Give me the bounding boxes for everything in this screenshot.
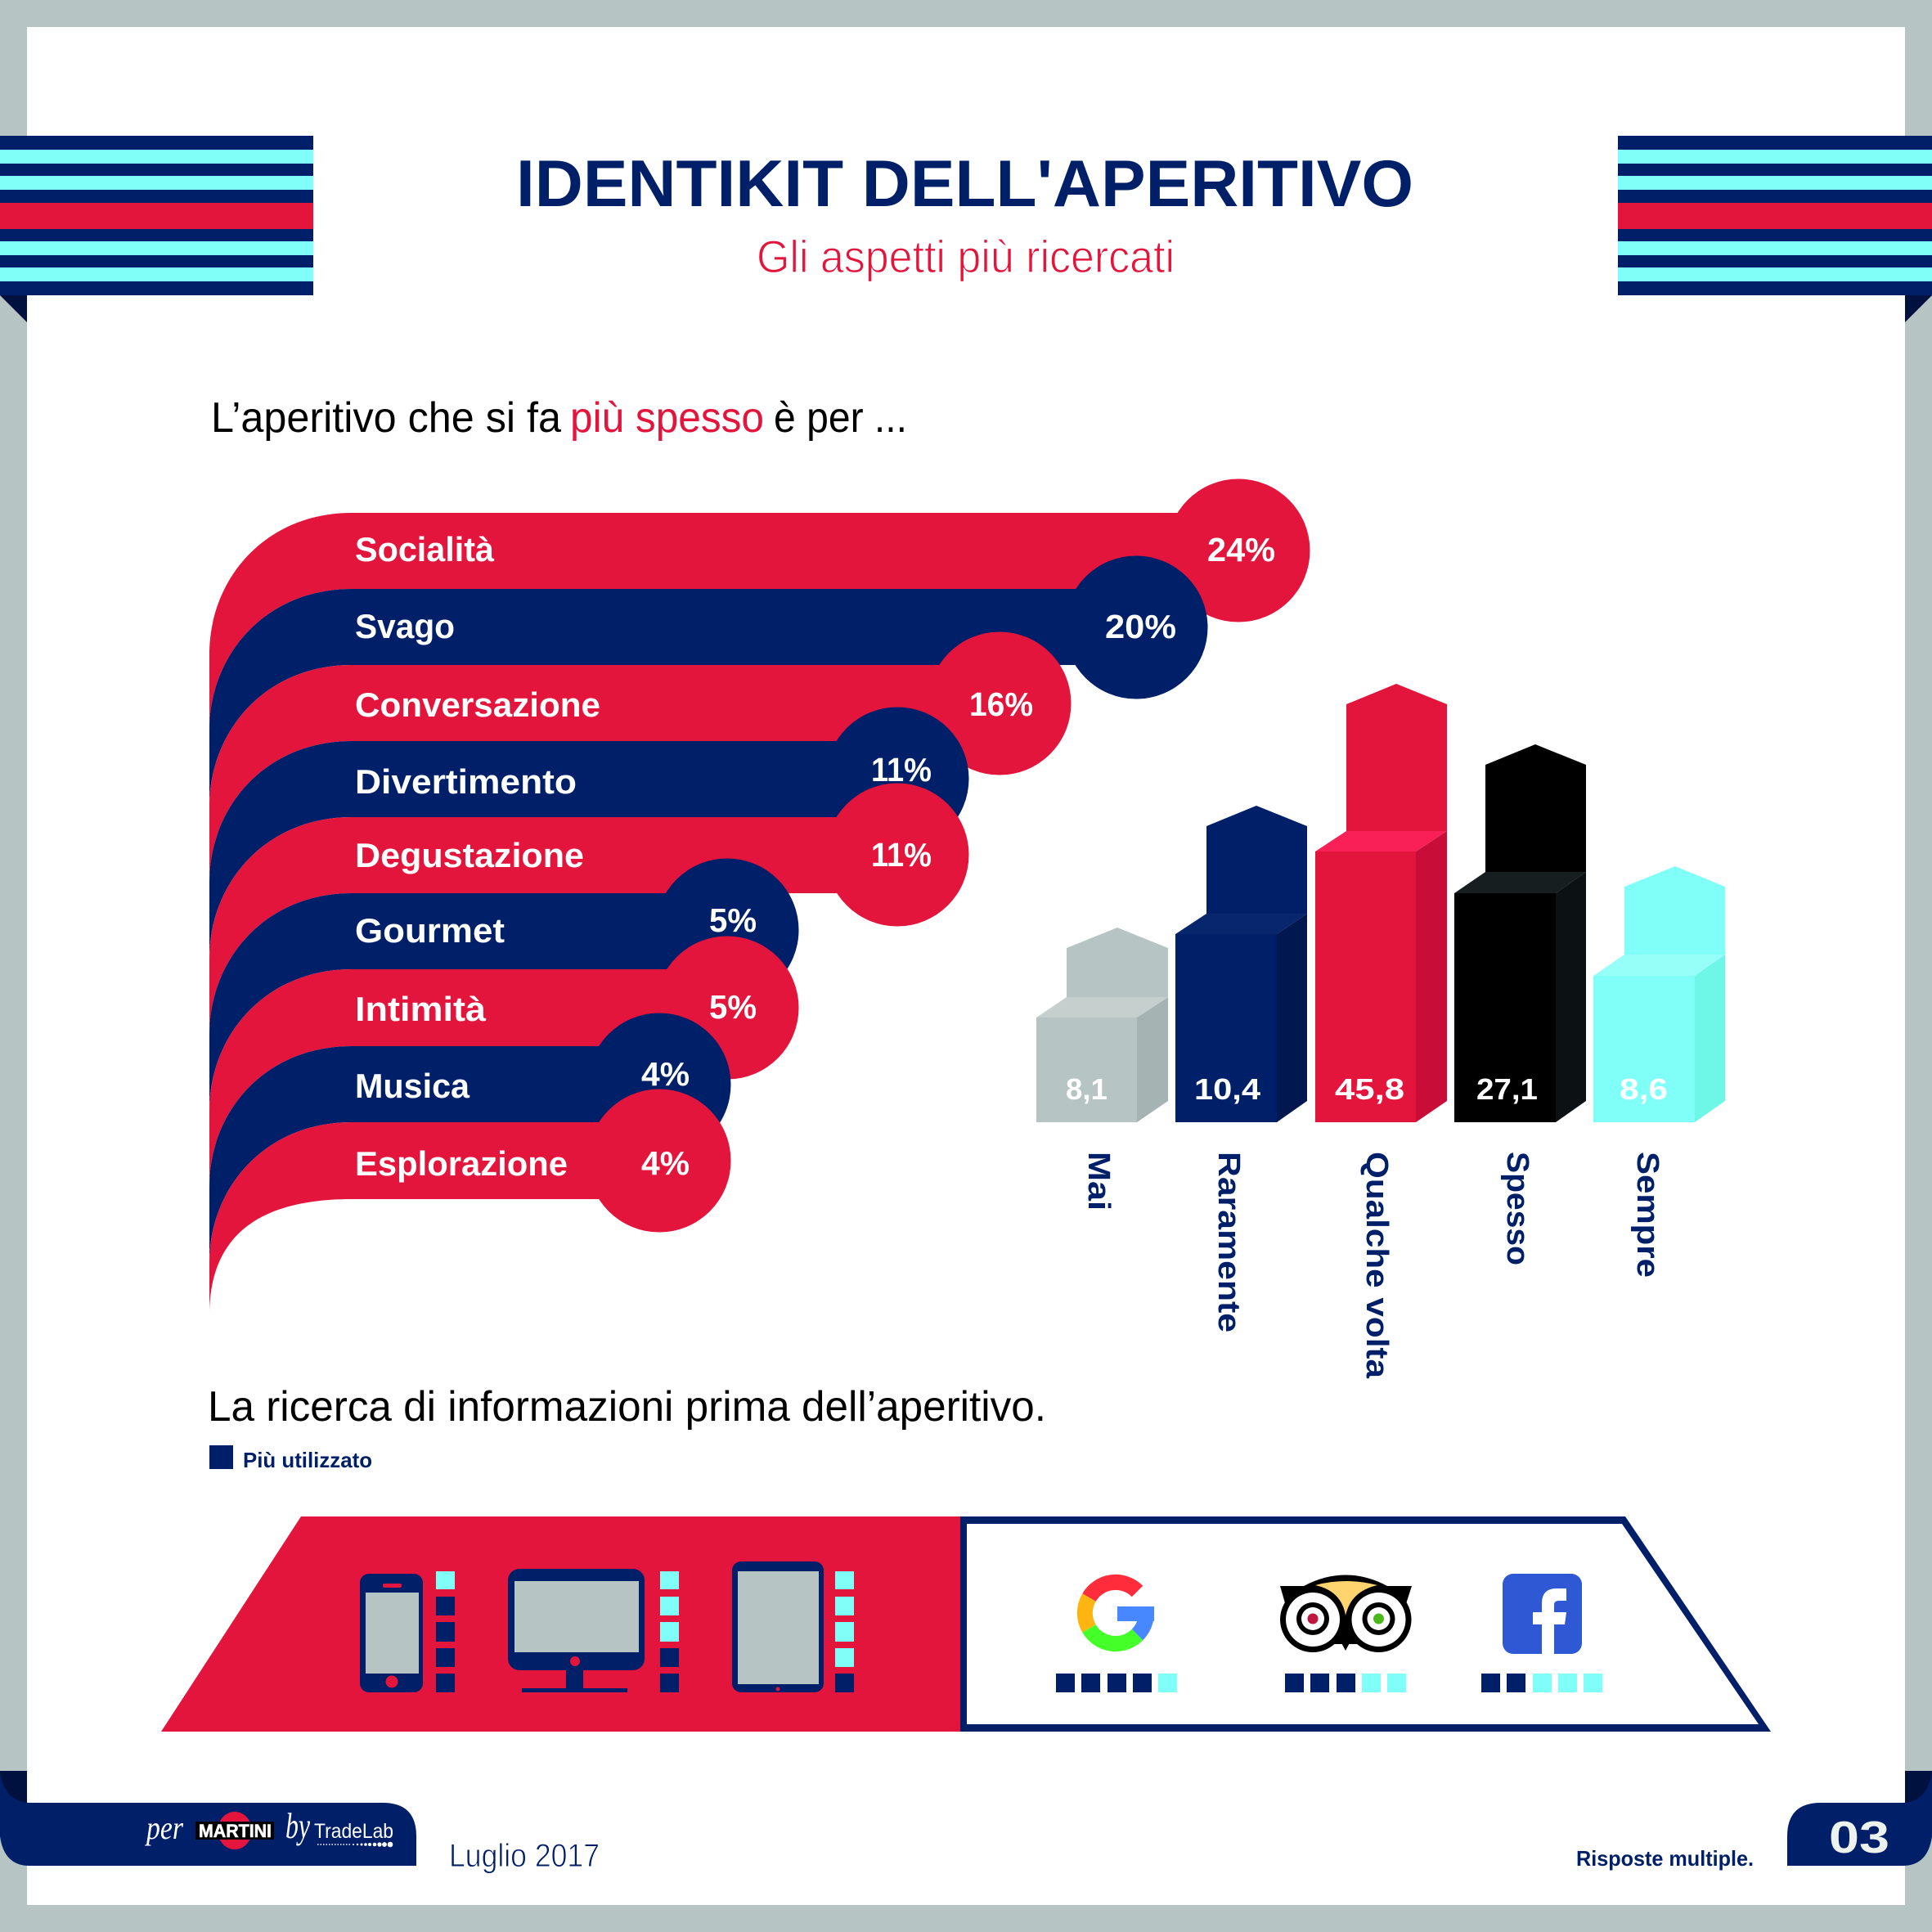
band: Divertimento 11%: Divertimento (355, 762, 577, 801)
band: Degustazione 11% (209, 784, 968, 1035)
3D bar chart: frequency (1036, 684, 1725, 1122)
heading: aperitivo frequency question: L’aperitivo che si fa (211, 394, 561, 442)
legend: most used: Più utilizzato (243, 1448, 372, 1472)
ranking chart: reasons for aperitivo (209, 479, 1310, 1315)
band: Socialità 24%: 24% (1207, 531, 1275, 568)
bar: Mai 8,1: 8,1 (1066, 1072, 1108, 1106)
logo: Martini (195, 1812, 274, 1849)
panel: devices (161, 1516, 961, 1732)
footnote: Risposte multiple. (1576, 1846, 1754, 1871)
band: Gourmet 5% (209, 859, 798, 1111)
bar category labels: Spesso (1500, 1152, 1534, 1265)
band: Socialità 24% (209, 479, 1310, 730)
rating: tablet (835, 1571, 854, 1692)
band: Divertimento 11% (209, 707, 968, 959)
band: Esplorazione 4%: 4% (641, 1144, 690, 1182)
bar: Sempre 8,6 (1593, 866, 1725, 1122)
band: Divertimento 11%: 11% (871, 751, 932, 789)
logo text: by: by (285, 1806, 310, 1846)
date: Luglio 2017 (449, 1838, 600, 1874)
footer tab: page number: 03 (1829, 1812, 1889, 1862)
band: Musica 4%: 4% (641, 1055, 690, 1093)
icon: TripAdvisor owl (1280, 1575, 1412, 1652)
icon: Google (1085, 1582, 1154, 1644)
bar: Qualche volta 45,8 (1315, 684, 1447, 1122)
band: Gourmet 5%: Gourmet (355, 911, 505, 950)
band: Esplorazione 4% (209, 1090, 731, 1315)
band: Musica 4%: Musica (355, 1067, 470, 1105)
band: Conversazione 16%: 16% (969, 685, 1033, 723)
band: Socialità 24%: Socialità (355, 530, 495, 568)
icon: tablet (732, 1561, 824, 1692)
icon: Facebook (1503, 1574, 1582, 1654)
band: Svago 20%: 20% (1105, 608, 1176, 645)
band: Degustazione 11%: Degustazione (355, 836, 584, 874)
rating: desktop (660, 1571, 679, 1692)
band: Conversazione 16%: Conversazione (355, 685, 600, 724)
band: Gourmet 5%: 5% (709, 901, 757, 939)
icon: desktop monitor (508, 1569, 645, 1692)
logo text: per: per (144, 1809, 183, 1846)
right striped ribbon (1618, 136, 1932, 322)
band: Esplorazione 4%: Esplorazione (355, 1144, 568, 1183)
heading: aperitivo frequency question: è per ... (774, 394, 907, 442)
band: Conversazione 16% (209, 631, 1072, 883)
band: Intimità 5% (209, 936, 798, 1187)
bar category labels: Raramente (1211, 1152, 1246, 1332)
subtitle: Gli aspetti più ricercati (757, 231, 1175, 282)
bar: Spesso 27,1 (1454, 744, 1586, 1122)
band: Svago 20% (209, 556, 1207, 806)
title: IDENTIKIT DELL'APERITIVO (516, 147, 1413, 221)
bar: Qualche volta 45,8: 45,8 (1335, 1072, 1404, 1106)
footer tab: left with logos (0, 1771, 416, 1866)
rating: TripAdvisor (1285, 1674, 1406, 1692)
bar: Mai 8,1 (1036, 928, 1168, 1122)
bar category labels (1081, 1152, 1665, 1379)
heading: aperitivo frequency question (211, 394, 907, 442)
rating: smartphone (436, 1571, 455, 1692)
bar category labels: Qualche volta (1359, 1152, 1394, 1379)
bar category labels: Mai (1081, 1152, 1116, 1211)
band: Degustazione 11%: 11% (871, 836, 932, 874)
logo: TradeLab: TradeLab (314, 1820, 393, 1843)
bar: Raramente 10,4 (1175, 806, 1307, 1122)
bar: Spesso 27,1: 27,1 (1476, 1072, 1538, 1106)
bar: Raramente 10,4: 10,4 (1194, 1072, 1260, 1106)
left striped ribbon (0, 136, 313, 322)
footer tab: page number (1787, 1771, 1932, 1866)
logo: Martini: MARTINI (199, 1821, 272, 1841)
heading: aperitivo frequency question: più spesso (570, 394, 764, 442)
band: Intimità 5%: 5% (709, 988, 757, 1026)
heading: information search: La ricerca di informazioni prima dell’aperitivo. (208, 1383, 1046, 1431)
band: Svago 20%: Svago (355, 607, 455, 645)
bar category labels: Sempre (1630, 1152, 1665, 1278)
band: Intimità 5%: Intimità (355, 990, 487, 1028)
band: Musica 4% (209, 1013, 731, 1263)
icon: smartphone (360, 1574, 423, 1692)
rating: Facebook (1481, 1674, 1602, 1692)
panel: online sources (960, 1516, 1771, 1732)
bar: Sempre 8,6: 8,6 (1620, 1072, 1668, 1106)
rating: Google (1056, 1674, 1177, 1692)
